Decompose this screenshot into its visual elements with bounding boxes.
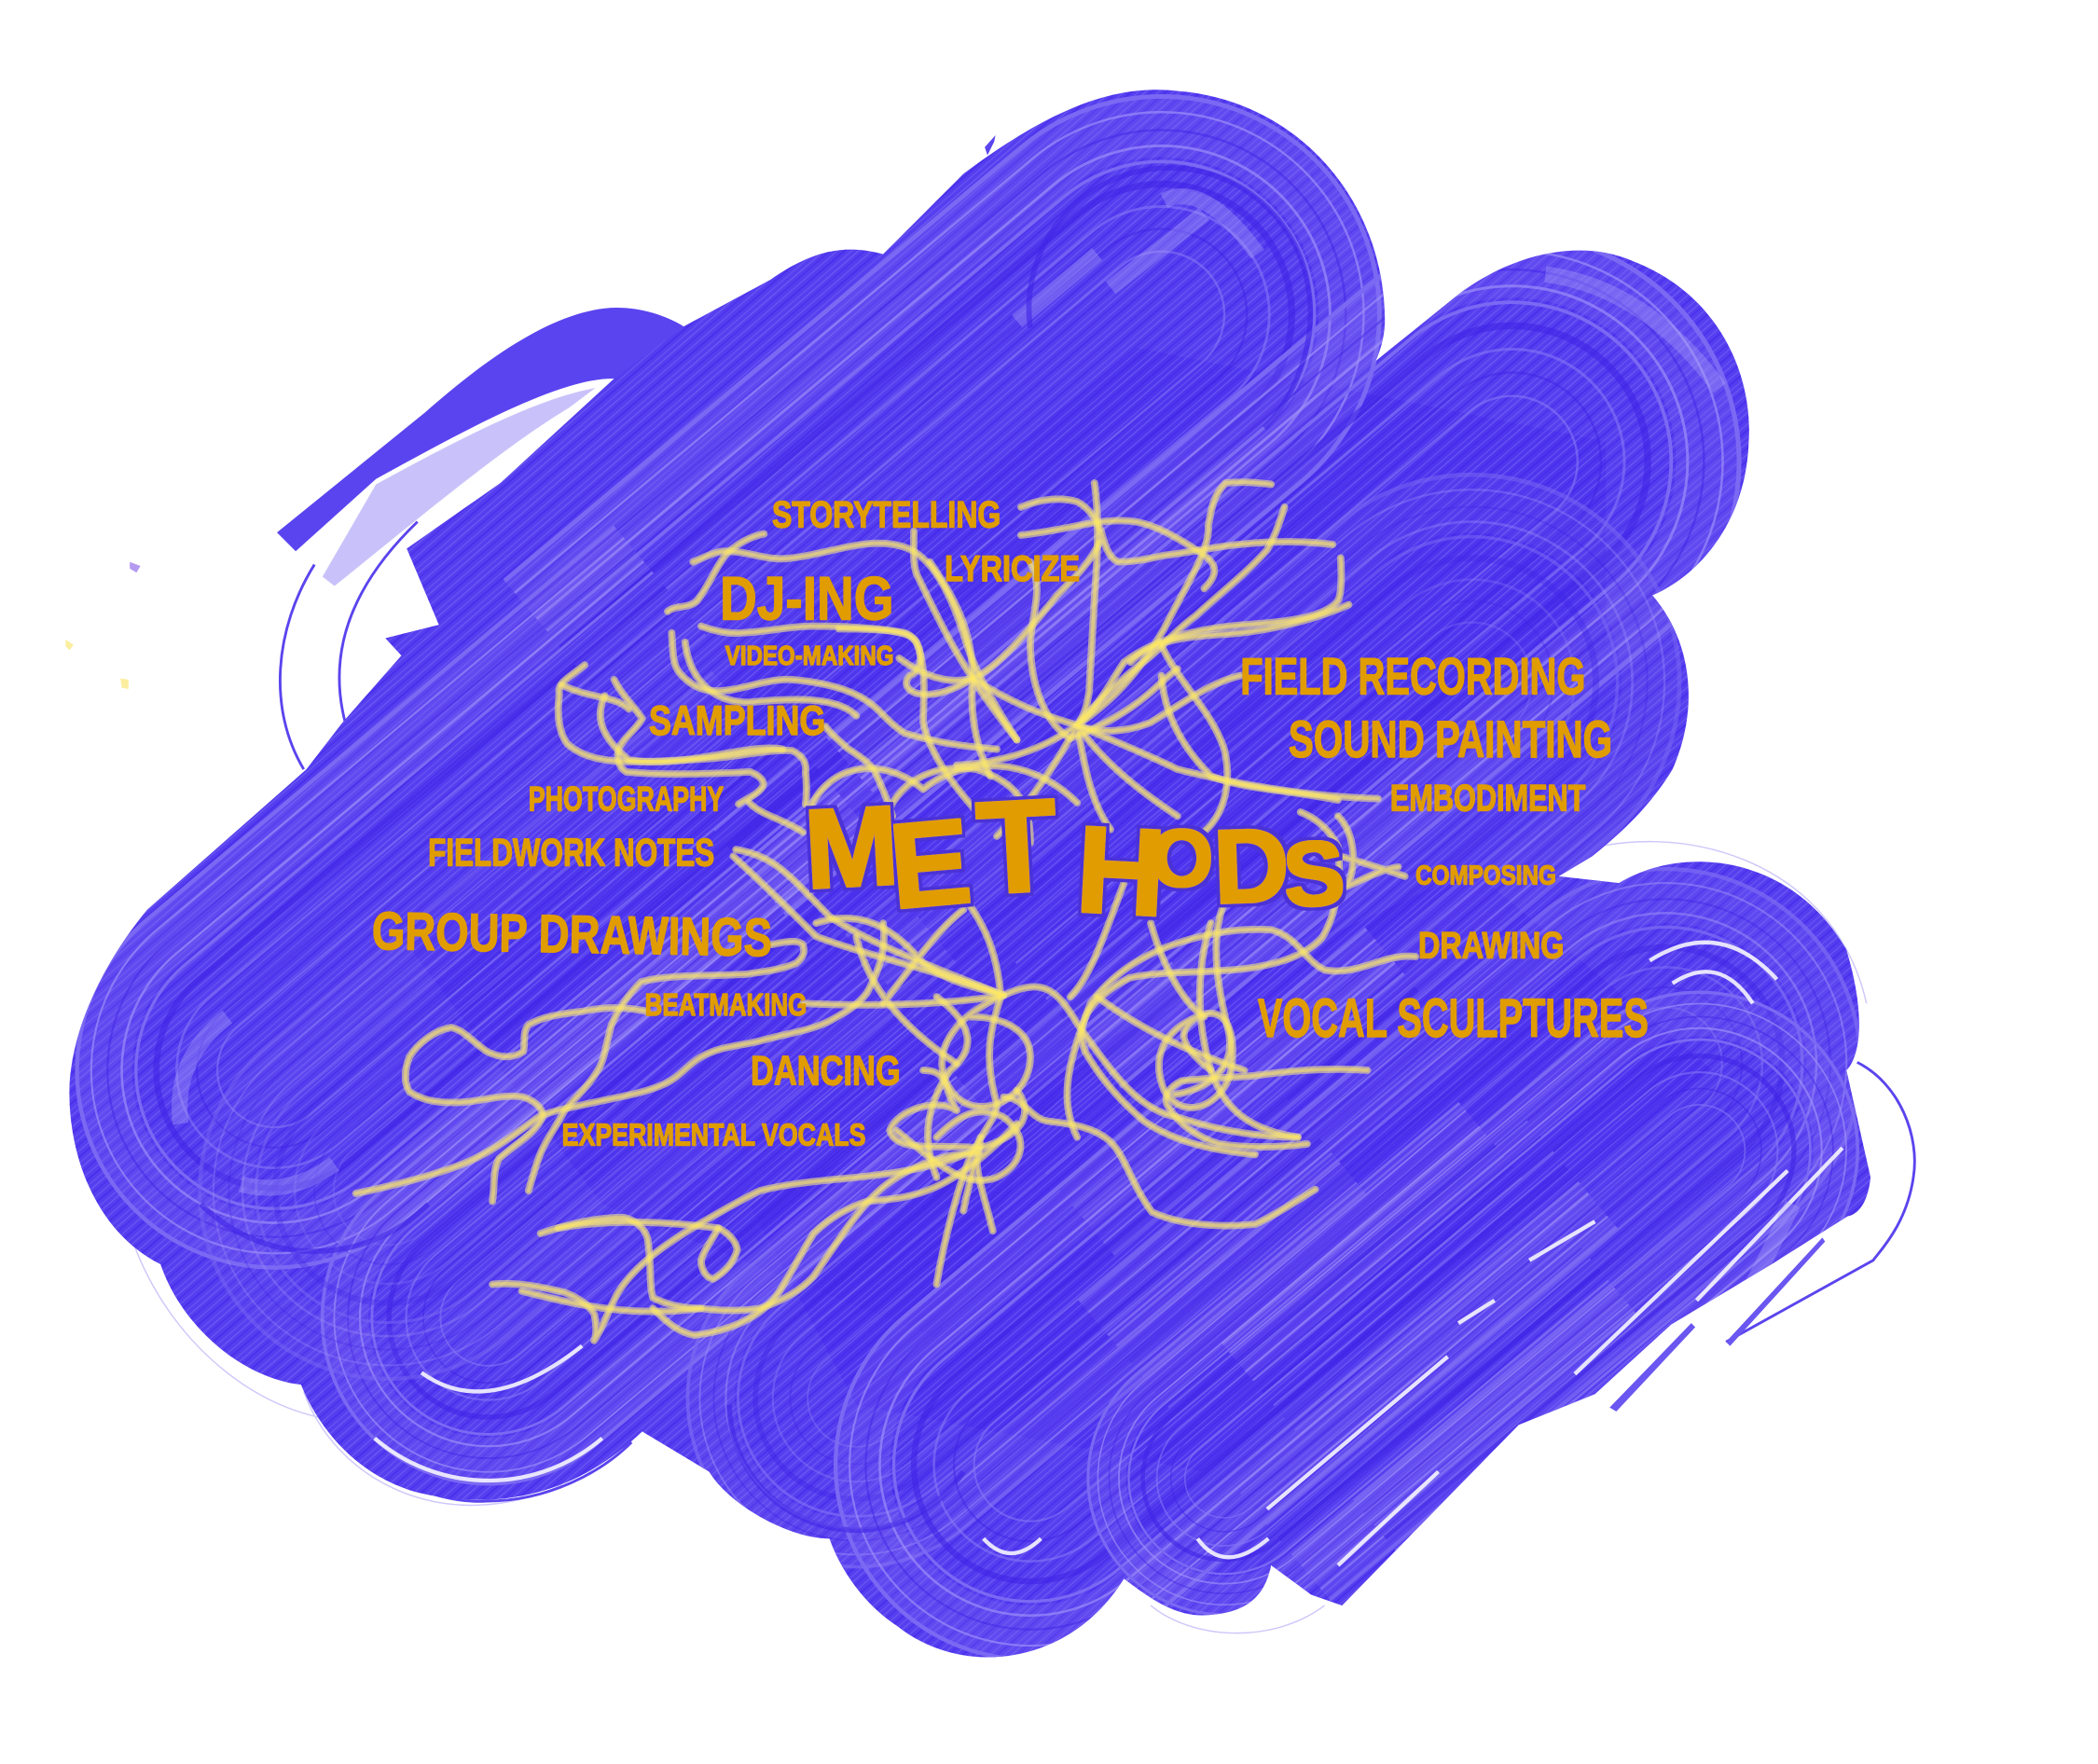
blob silhouette [69,90,1870,1657]
title: methods: D [1211,806,1291,926]
title: methods: M [802,782,902,913]
label: field recording: FIELD RECORDING [1240,647,1585,706]
label: embodiment: EMBODIMENT [1390,778,1586,820]
label: vocal sculptures: VOCAL SCULPTURES [1258,988,1649,1049]
label: experimental vocals: EXPERIMENTAL VOCALS [562,1117,865,1151]
title: methods: H [1073,799,1169,942]
thin tail strips [1609,1237,1825,1412]
tangled yellow root lines [356,482,1415,1341]
lavender patches [180,197,1793,1338]
label: dj-ing: DJ-ING [720,563,894,632]
label: video-making: VIDEO-MAKING [725,641,894,671]
dark core [401,348,1606,1338]
label: drawing: DRAWING [1418,924,1564,966]
light gaps [375,943,1843,1565]
title: methods: T [973,771,1061,922]
specks [130,562,141,572]
label: dancing: DANCING [751,1049,901,1095]
label: group drawings: GROUP DRAWINGS [371,902,773,968]
label: composing: COMPOSING [1415,861,1556,891]
title: methods: E [884,793,976,934]
brush texture [69,90,1870,1658]
label: photography: PHOTOGRAPHY [529,779,724,819]
title: methods: O [1151,814,1213,903]
label: storytelling: STORYTELLING [772,493,1001,535]
title: methods: S [1280,821,1347,927]
upper-left brush band [277,308,683,551]
thin outer arcs [280,522,1914,1501]
lighter streaks under band [323,388,596,586]
label: fieldwork notes: FIELDWORK NOTES [428,830,714,874]
label: beatmaking: BEATMAKING [645,987,807,1022]
infographic canvas [65,90,1916,1658]
scribble blob [65,90,1916,1658]
label: lyricize: LYRICIZE [945,549,1080,589]
label: sampling: SAMPLING [649,698,825,744]
dark inner arcs [200,168,1310,1530]
label: sound painting: SOUND PAINTING [1289,710,1612,768]
